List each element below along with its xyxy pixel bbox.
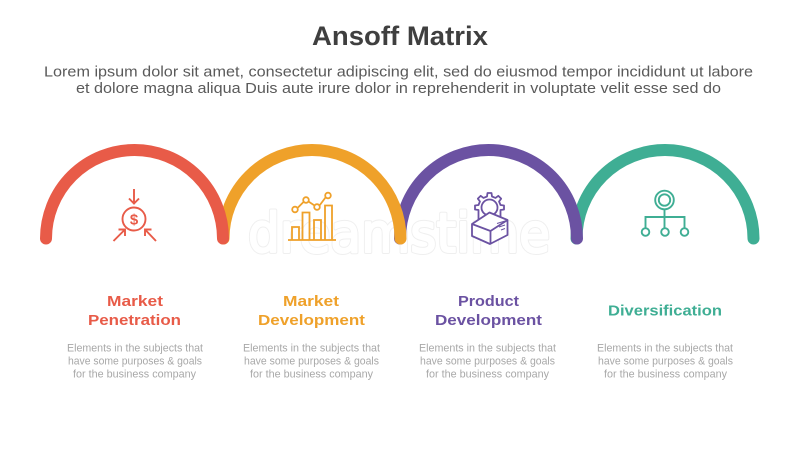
description: market penetration: [67, 342, 203, 380]
subtitle text: et dolore magna aliqua Duis aute irure dolor in reprehenderit in voluptate velit esse sed do: [76, 80, 721, 97]
icon: dollar with inward arrows: $: [130, 212, 139, 228]
arc: market development: [224, 150, 400, 238]
description: product development: Elements in the subjects that: [419, 342, 556, 354]
heading: product development: Product: [458, 293, 519, 310]
heading: product development: [435, 293, 542, 329]
description: diversification: for the business company: [604, 368, 727, 380]
arc: product development: [400, 150, 577, 238]
description: market development: have some purposes & goals: [244, 356, 379, 368]
heading: market development: [258, 293, 365, 329]
heading: product development: Development: [435, 312, 542, 329]
icon: hierarchy network: [642, 191, 688, 236]
description: market penetration: have some purposes & goals: [68, 356, 202, 368]
description: product development: [419, 342, 556, 380]
column: diversification: [597, 302, 733, 380]
description: market penetration: Elements in the subjects that: [67, 342, 203, 354]
description: product development: have some purposes & goals: [420, 356, 555, 368]
arc: diversification: [576, 150, 754, 238]
heading: market penetration: Penetration: [88, 312, 181, 329]
description: product development: for the business company: [426, 368, 549, 380]
title: Ansoff Matrix: [312, 21, 488, 51]
description: market penetration: for the business company: [73, 368, 196, 380]
description: diversification: [597, 342, 733, 380]
subtitle text: Lorem ipsum dolor sit amet, consectetur adipiscing elit, sed do eiusmod tempor incididunt ut labore: [44, 64, 753, 80]
heading: market development: Development: [258, 312, 365, 329]
column: market penetration: [67, 293, 203, 380]
watermark: dreamstime: [248, 202, 550, 265]
heading: market penetration: Market: [107, 293, 163, 310]
heading: diversification: Diversification: [608, 302, 722, 320]
description: market development: [243, 342, 380, 380]
description: diversification: Elements in the subjects that: [597, 342, 733, 354]
watermark: dreamstime: [248, 202, 550, 265]
arc: market penetration: [46, 150, 223, 238]
description: diversification: have some purposes & goals: [598, 356, 733, 368]
column: market development: [243, 293, 380, 380]
icon: bar chart with trend line: [288, 193, 336, 240]
column: product development: [419, 293, 556, 380]
icon: dollar with inward arrows: [114, 189, 156, 241]
description: market development: Elements in the subjects that: [243, 342, 380, 354]
description: market development: for the business company: [250, 368, 373, 380]
subtitle text: [44, 64, 753, 97]
heading: market development: Market: [283, 293, 339, 310]
heading: market penetration: [88, 293, 181, 329]
icon: gear and box: [472, 193, 508, 244]
